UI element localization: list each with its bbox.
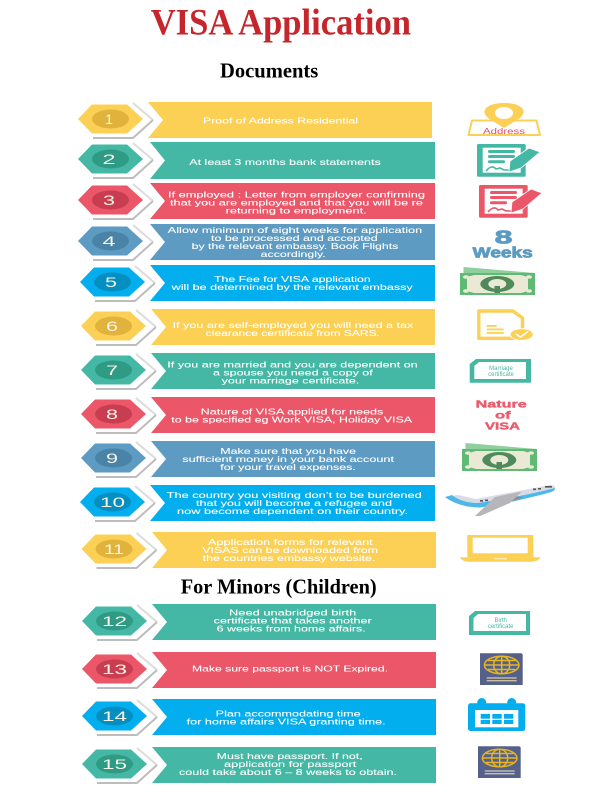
icon: 8 weeks: Weeks bbox=[473, 245, 533, 261]
text 10: that you will become a refugee and bbox=[196, 499, 392, 508]
text 3: If employed : Letter from employer confirming bbox=[168, 190, 425, 200]
row 4 bbox=[78, 224, 435, 260]
banner 3 bbox=[150, 183, 435, 219]
text 3: returning to employment. bbox=[226, 206, 367, 216]
text 3: that you are employed and that you will be re bbox=[170, 198, 423, 208]
badge 14 bbox=[82, 700, 157, 735]
row 15 bbox=[82, 747, 436, 783]
icon: nature of visa: of bbox=[495, 409, 511, 421]
banner 15 bbox=[152, 747, 436, 783]
badge 2 bbox=[78, 143, 153, 178]
icon: 8 weeks: 8 bbox=[495, 226, 512, 247]
badge 2: 2 bbox=[102, 151, 116, 167]
row 3 bbox=[78, 183, 435, 219]
row 10 bbox=[80, 485, 435, 521]
icon: marriage certificate: Marriage bbox=[489, 366, 513, 372]
icon: birth certificate: Birth bbox=[495, 618, 507, 624]
badge 13 bbox=[82, 653, 157, 688]
text 10: The country you visiting don’t to be burdened bbox=[167, 491, 422, 500]
badge 3: 3 bbox=[103, 192, 115, 208]
row 6 bbox=[81, 309, 435, 345]
badge 15 bbox=[82, 748, 157, 783]
text 6: If you are self-employed you will need a tax bbox=[173, 321, 413, 330]
row 1 bbox=[78, 102, 432, 138]
badge 7: 7 bbox=[106, 362, 118, 378]
text 2: At least 3 months bank statements bbox=[189, 158, 381, 167]
icon: marriage certificate bbox=[470, 359, 531, 383]
text 7: If you are married and you are dependent on bbox=[167, 361, 418, 370]
icon: passport 2 bbox=[478, 746, 521, 778]
text 11 bbox=[202, 538, 378, 563]
text 14: for home affairs VISA granting time. bbox=[187, 718, 386, 727]
text 7: a spouse you need a copy of bbox=[213, 369, 374, 378]
banner 1 bbox=[148, 102, 432, 138]
icon: nature of visa: VISA bbox=[485, 420, 521, 432]
icon: passport bbox=[480, 653, 523, 685]
icon: birth certificate bbox=[469, 611, 530, 635]
icon: teal document bbox=[477, 144, 540, 177]
text 5 bbox=[170, 275, 413, 292]
text 4: accordingly. bbox=[261, 250, 326, 259]
icon: red document bbox=[479, 185, 542, 218]
text 13: Make sure passport is NOT Expired. bbox=[192, 664, 388, 673]
banner 11 bbox=[152, 532, 436, 568]
icon: marriage certificate: certificate bbox=[488, 372, 514, 378]
badge 7 bbox=[81, 354, 156, 389]
text 7: your marriage certificate. bbox=[222, 377, 359, 386]
text 8 bbox=[171, 407, 413, 424]
badge 5 bbox=[80, 266, 155, 301]
text 12: certificate that takes another bbox=[214, 616, 372, 625]
badge 12 bbox=[82, 605, 157, 640]
badge 8: 8 bbox=[106, 406, 118, 422]
banner 8 bbox=[151, 397, 435, 433]
title: VISA Application bbox=[151, 3, 411, 44]
icon: nature of visa: Nature bbox=[476, 398, 527, 410]
banner 10 bbox=[150, 485, 435, 521]
badge 10: 10 bbox=[100, 494, 125, 510]
text 5: The Fee for VISA application bbox=[214, 275, 371, 284]
banner 12 bbox=[152, 604, 436, 640]
badge 1 bbox=[78, 103, 153, 138]
text 11: the countries embassy website. bbox=[203, 554, 375, 563]
text 3 bbox=[168, 190, 425, 216]
text 10 bbox=[167, 491, 422, 516]
text 9 bbox=[182, 447, 395, 472]
row 2 bbox=[78, 142, 435, 179]
banner 2 bbox=[150, 142, 435, 179]
badge 9: 9 bbox=[106, 450, 118, 466]
text 15: application for passport bbox=[224, 760, 358, 769]
banner 5 bbox=[150, 265, 435, 301]
badge 9 bbox=[81, 442, 156, 477]
text 12: Need unabridged birth bbox=[229, 608, 356, 617]
badge 1: 1 bbox=[105, 111, 113, 127]
banner 14 bbox=[152, 699, 436, 735]
icon: birth certificate: certificate bbox=[488, 624, 514, 630]
icon: laptop bbox=[460, 535, 541, 562]
badge 11: 11 bbox=[104, 541, 124, 557]
row 12 bbox=[82, 604, 436, 640]
heading: Documents: Documents bbox=[220, 59, 318, 83]
banner 13 bbox=[152, 652, 436, 688]
badge 4: 4 bbox=[102, 233, 116, 249]
row 8 bbox=[81, 397, 435, 433]
text 9: sufficient money in your bank account bbox=[182, 455, 395, 464]
row 9 bbox=[81, 441, 435, 477]
text 8: to be specified eg Work VISA, Holiday VISA bbox=[171, 415, 413, 424]
row 13 bbox=[82, 652, 436, 688]
banner 7 bbox=[151, 353, 435, 389]
badge 8 bbox=[81, 398, 156, 433]
banner 4 bbox=[150, 224, 435, 260]
text 14 bbox=[187, 710, 386, 727]
text 12 bbox=[214, 608, 372, 633]
text 9: Make sure that you have bbox=[220, 447, 356, 456]
banner 9 bbox=[151, 441, 435, 477]
text 6: clearance certificate from SARS. bbox=[206, 329, 380, 338]
icon: 8 weeks bbox=[473, 226, 533, 261]
icon: nature of visa bbox=[476, 398, 527, 432]
text 12: 6 weeks from home affairs. bbox=[217, 624, 366, 633]
badge 13: 13 bbox=[102, 661, 127, 677]
icon: tax document bbox=[479, 311, 533, 340]
text 14: Plan accommodating time bbox=[216, 710, 361, 719]
text 11: VISAS can be downloaded from bbox=[202, 546, 378, 555]
badge 14: 14 bbox=[102, 708, 127, 724]
icon: calendar bbox=[468, 698, 525, 731]
row 7 bbox=[81, 353, 435, 389]
icon: airplane bbox=[445, 485, 555, 516]
text 4 bbox=[168, 226, 422, 259]
text 6 bbox=[173, 321, 413, 338]
text 4: Allow minimum of eight weeks for application bbox=[168, 226, 422, 235]
row 14 bbox=[82, 699, 436, 735]
badge 15: 15 bbox=[102, 756, 127, 772]
text 15: could take about 6 – 8 weeks to obtain. bbox=[179, 768, 397, 777]
banner 6 bbox=[151, 309, 435, 345]
badge 12: 12 bbox=[102, 613, 127, 629]
text 4: to be processed and accepted bbox=[211, 234, 378, 243]
icon: money 2 bbox=[462, 443, 537, 471]
badge 3 bbox=[78, 184, 153, 219]
row 5 bbox=[80, 265, 435, 301]
text 4: by the relevant embassy. Book Flights bbox=[192, 242, 398, 251]
row 11 bbox=[82, 532, 436, 568]
text 8: Nature of VISA applied for needs bbox=[201, 407, 383, 416]
text 5: will be determined by the relevant embassy bbox=[170, 283, 413, 292]
badge 10 bbox=[80, 486, 155, 521]
text 7 bbox=[167, 361, 418, 386]
icon: address pin bbox=[468, 103, 540, 136]
badge 4 bbox=[78, 225, 153, 260]
badge 5: 5 bbox=[105, 274, 117, 290]
text 10: now become dependent on their country. bbox=[177, 507, 408, 516]
text 15 bbox=[179, 752, 397, 777]
text 1: Proof of Address Residential bbox=[203, 116, 358, 126]
icon: money bbox=[460, 267, 535, 295]
badge 6: 6 bbox=[106, 318, 118, 334]
text 11: Application forms for relevant bbox=[208, 538, 374, 547]
badge 11 bbox=[82, 533, 156, 568]
heading: For Minors: For Minors (Children) bbox=[181, 574, 377, 598]
icon: address pin: Address bbox=[483, 127, 525, 136]
text 9: for your travel expenses. bbox=[220, 463, 356, 472]
badge 6 bbox=[81, 310, 156, 345]
text 15: Must have passport. If not, bbox=[217, 752, 363, 761]
